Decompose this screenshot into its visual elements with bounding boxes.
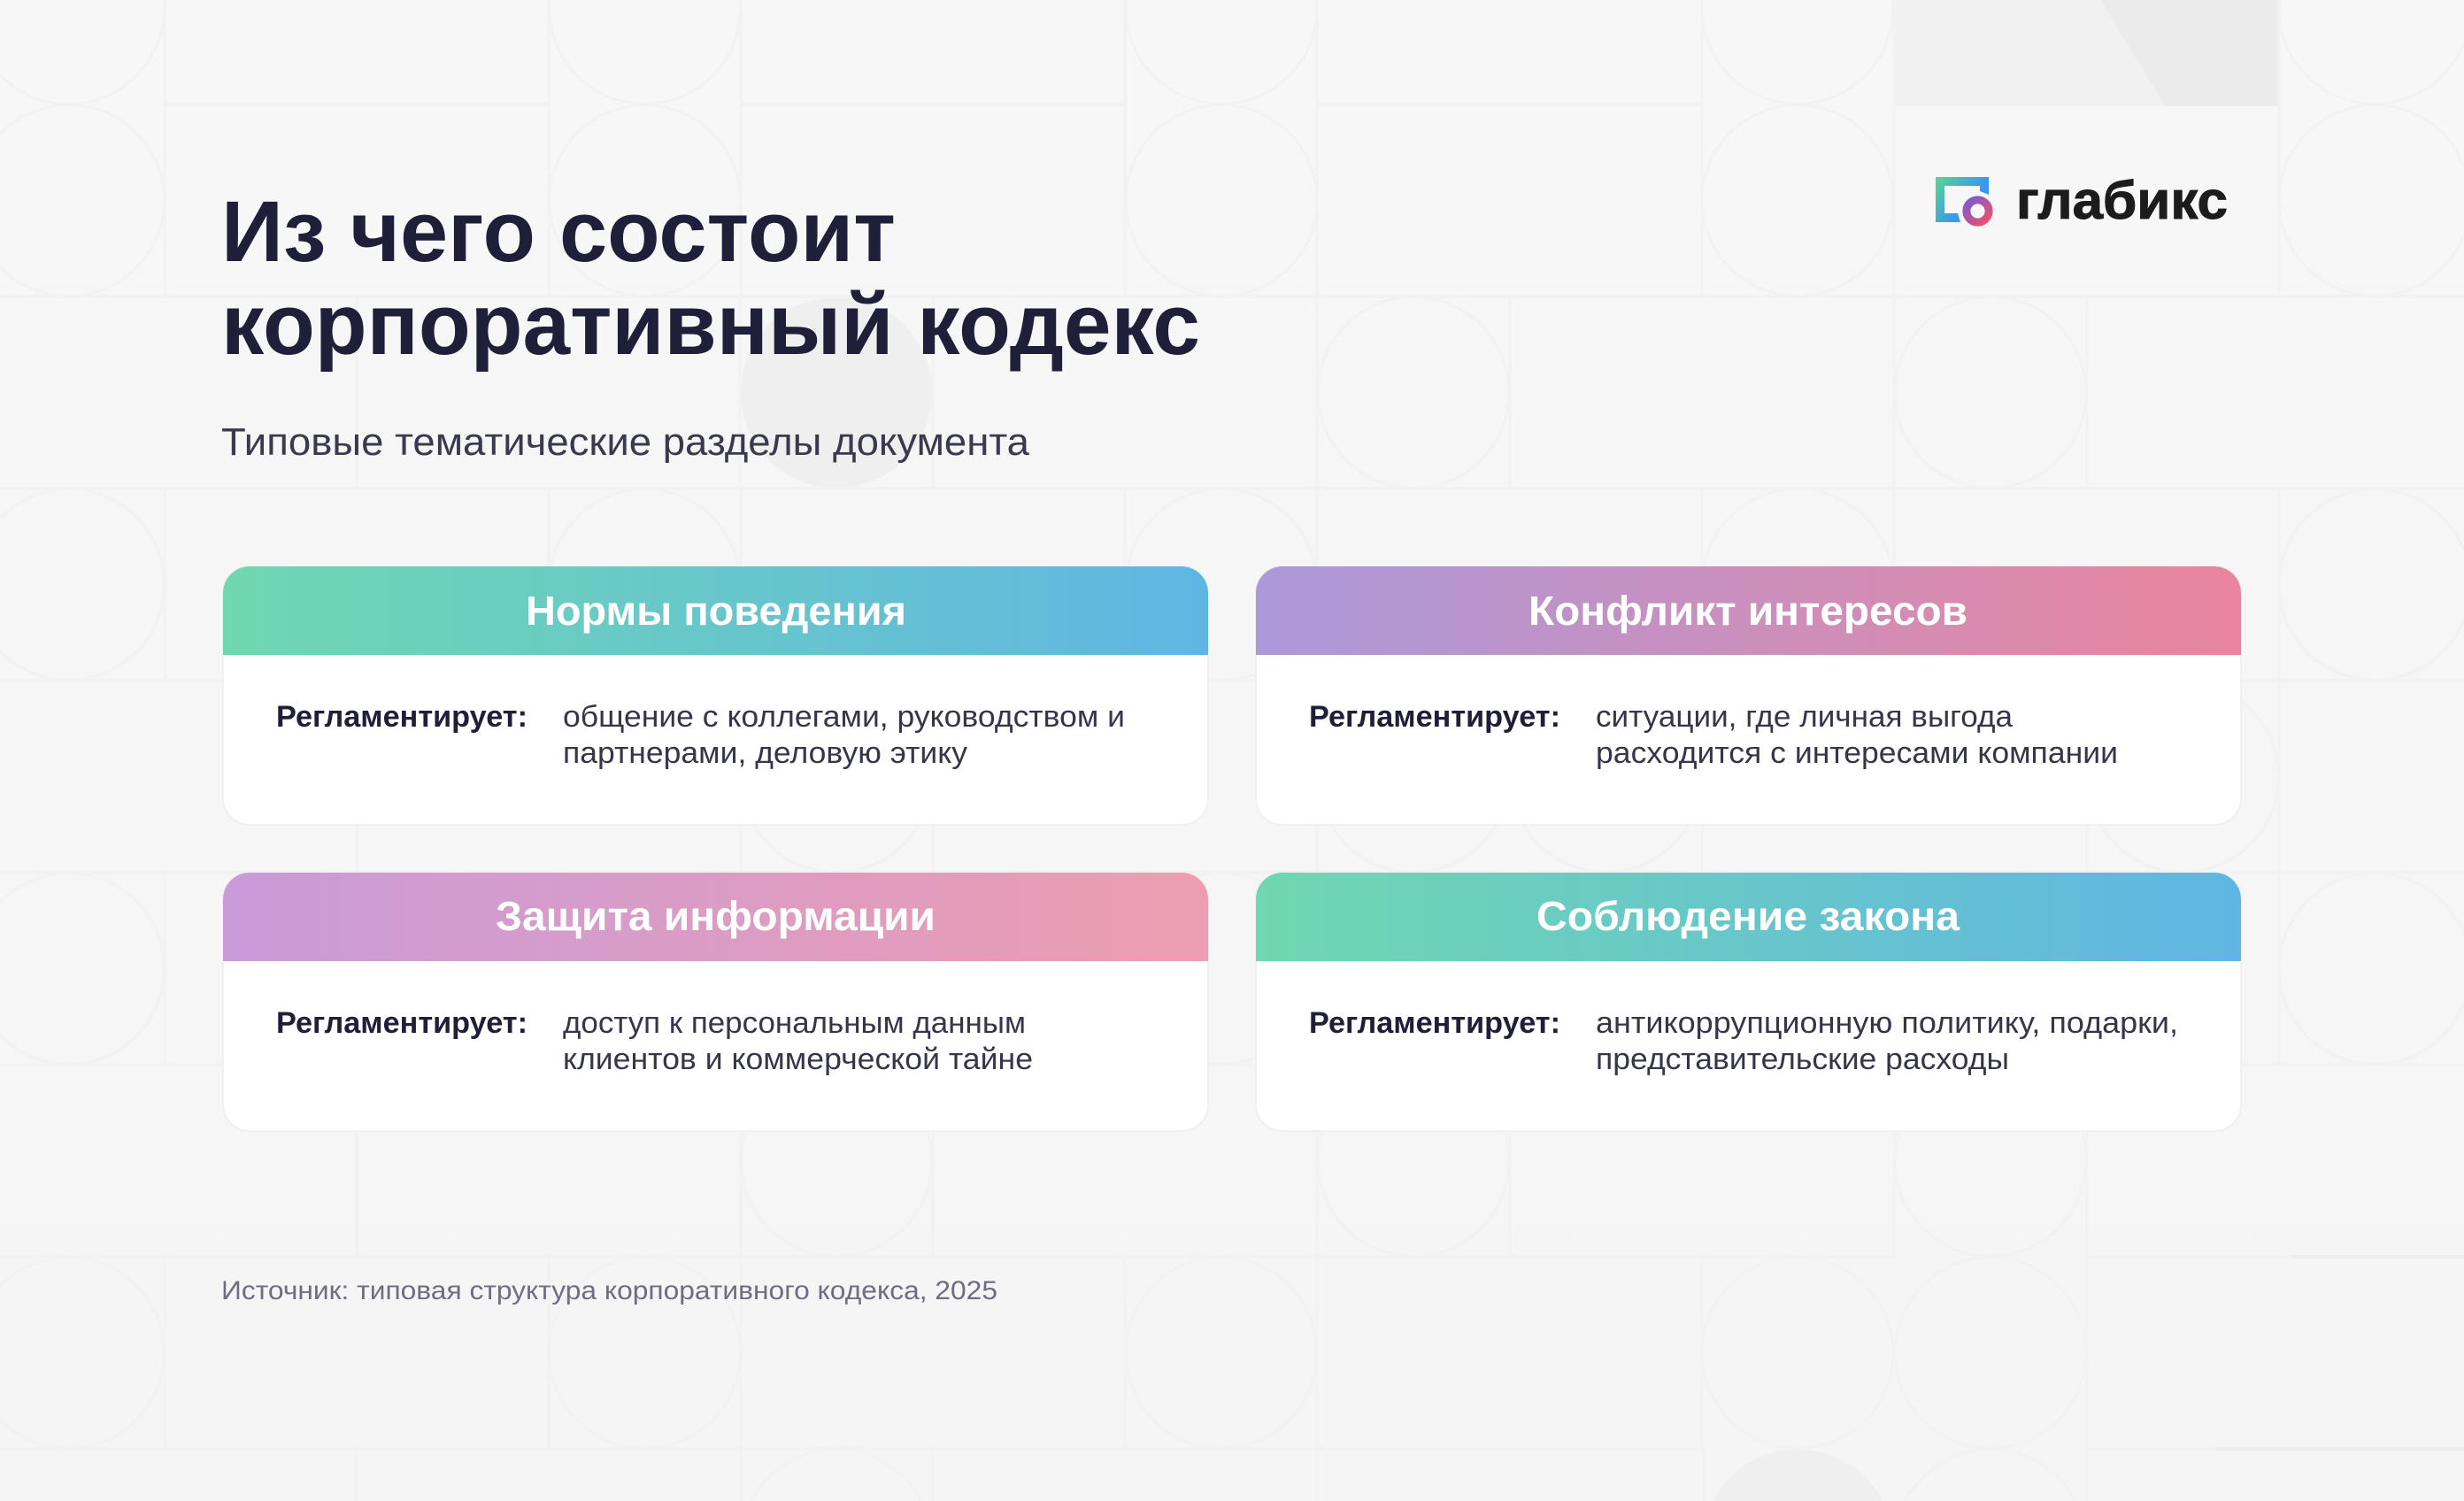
title bbox=[221, 183, 1200, 373]
card header: Конфликт интересов bbox=[1528, 588, 1967, 634]
panel: Конфликт интересов bbox=[1256, 566, 2241, 825]
title: корпоративный кодекс bbox=[221, 276, 1200, 373]
card description: клиентов и коммерческой тайне bbox=[563, 1043, 1033, 1076]
card label: Регламентирует: bbox=[276, 1006, 527, 1040]
card header: Соблюдение закона bbox=[1536, 893, 1960, 939]
card description: ситуации, где личная выгода bbox=[1596, 700, 2013, 734]
card description: общение с коллегами, руководством и bbox=[563, 700, 1125, 734]
card description: доступ к персональным данным bbox=[563, 1006, 1026, 1040]
card label: Регламентирует: bbox=[1309, 700, 1560, 734]
card label: Регламентирует: bbox=[1309, 1006, 1560, 1040]
card label: Регламентирует: bbox=[276, 700, 527, 734]
card description: партнерами, деловую этику bbox=[563, 736, 967, 770]
panel: Соблюдение закона bbox=[1256, 873, 2241, 1131]
panel: Нормы поведения bbox=[223, 566, 1208, 825]
card description: антикоррупционную политику, подарки, bbox=[1596, 1006, 2178, 1040]
logo wordmark: глабикс bbox=[2016, 171, 2228, 230]
source note: Источник: типовая структура корпоративного кодекса, 2025 bbox=[221, 1276, 997, 1305]
card description: представительские расходы bbox=[1596, 1043, 2009, 1076]
logo bbox=[1936, 171, 2228, 230]
card header bbox=[1256, 873, 2241, 961]
card description bbox=[1596, 700, 2118, 770]
card description bbox=[1596, 1006, 2178, 1076]
card header bbox=[223, 873, 1208, 961]
card description bbox=[563, 1006, 1033, 1076]
card header: Защита информации bbox=[496, 893, 936, 939]
card description: расходится с интересами компании bbox=[1596, 736, 2118, 770]
card header: Нормы поведения bbox=[526, 588, 906, 634]
logo icon bbox=[1936, 177, 1989, 222]
panel: Защита информации bbox=[223, 873, 1208, 1131]
card description bbox=[563, 700, 1125, 770]
card header bbox=[1256, 566, 2241, 655]
title: Из чего состоит bbox=[221, 183, 896, 280]
subtitle: Типовые тематические разделы документа bbox=[221, 420, 1030, 464]
card header bbox=[223, 566, 1208, 655]
